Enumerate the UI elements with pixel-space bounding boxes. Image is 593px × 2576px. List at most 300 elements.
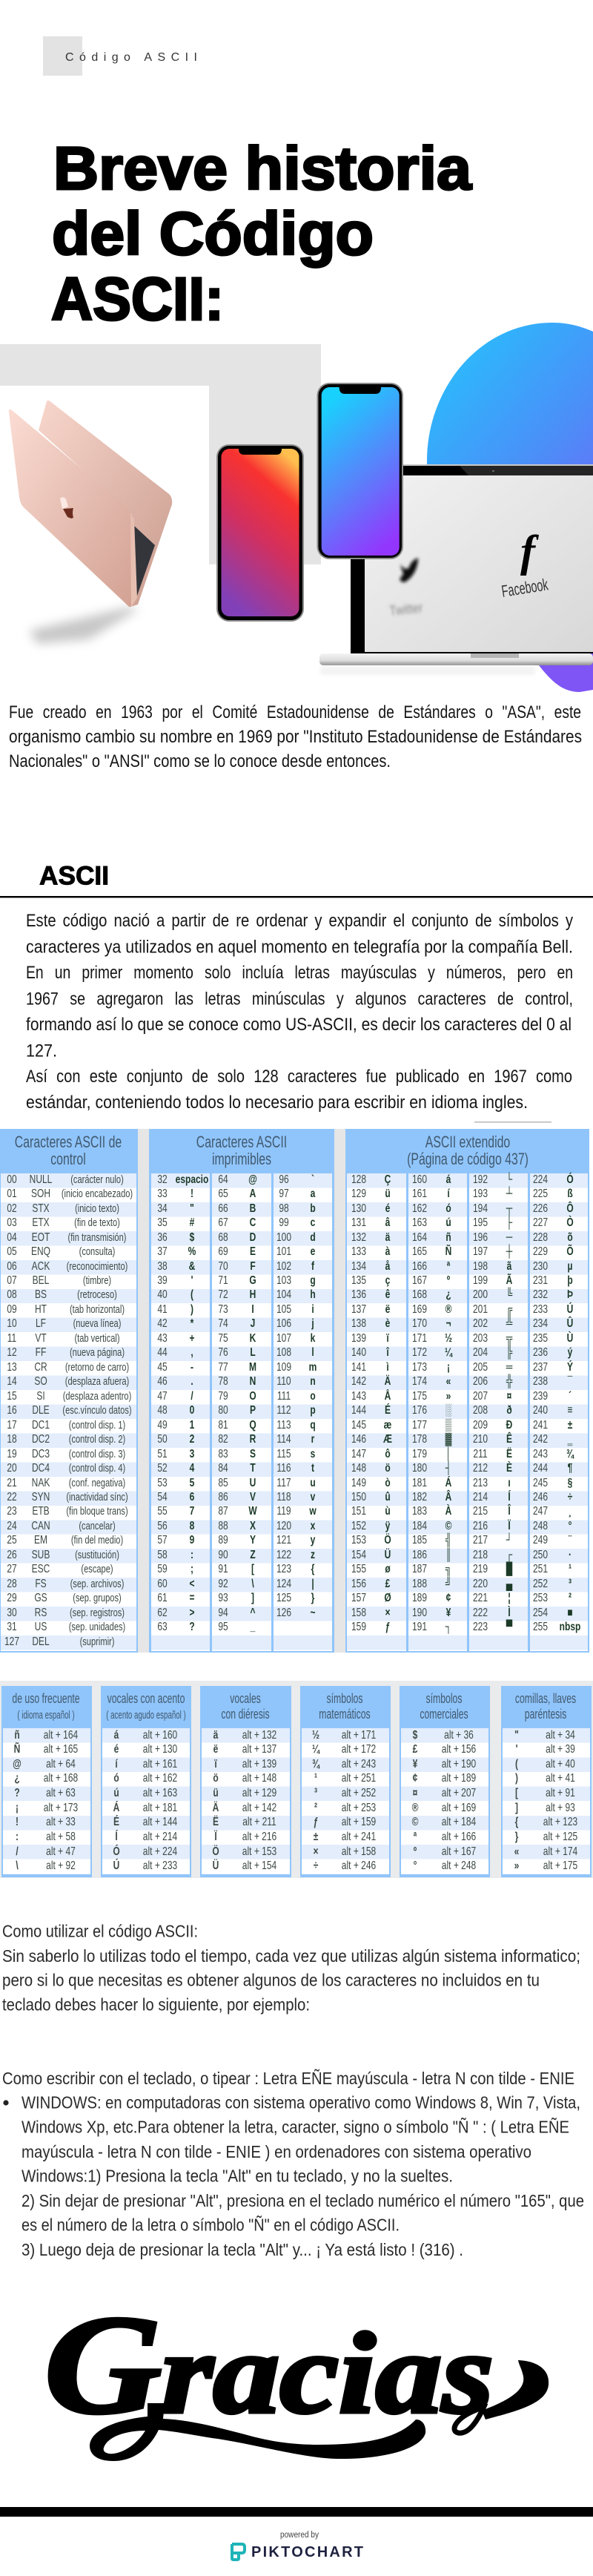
column: characters 32-63: # <box>189 1216 194 1229</box>
column: characters 64-95: Z <box>250 1549 255 1561</box>
column: characters 32-63 <box>175 1173 208 1633</box>
column: codes 32-63 <box>157 1173 168 1633</box>
text block: history of ASCII: estándar, conteniendo todos lo necesario para escribir en idioma ingles. <box>26 1093 528 1113</box>
column: characters 128-159 <box>383 1173 392 1633</box>
column: codes 160-191: 185 <box>412 1534 427 1546</box>
heading: matemáticos <box>319 1707 371 1722</box>
column: alt codes: alt + 233 <box>143 1859 177 1872</box>
column: control descriptions: (fin de texto) <box>74 1216 120 1229</box>
column: characters: « <box>514 1845 519 1858</box>
column: characters 128-159: à <box>385 1245 390 1258</box>
column: control codes: 03 <box>7 1216 17 1229</box>
column: characters: ½ <box>312 1729 319 1742</box>
column: codes 160-191: 173 <box>412 1361 427 1374</box>
column: codes 32-63: 55 <box>157 1505 168 1518</box>
column: characters: ¥ <box>413 1758 417 1770</box>
column: characters 128-159: ü <box>385 1187 390 1200</box>
row stripes <box>202 1728 290 1874</box>
column: alt codes: alt + 190 <box>442 1758 476 1770</box>
column: codes 224-255 <box>533 1173 548 1633</box>
column: control codes <box>4 1173 19 1648</box>
column: characters 128-159: è <box>385 1317 390 1330</box>
column: characters: ² <box>314 1802 317 1814</box>
column: characters 160-191: ¢ <box>446 1592 451 1604</box>
column: characters 96-126: z <box>311 1549 315 1561</box>
row stripes <box>347 1173 588 1651</box>
column: characters 224-255: ÷ <box>568 1491 572 1503</box>
column: control descriptions: (sep. registros) <box>70 1607 125 1619</box>
column: characters 128-159: ÿ <box>385 1520 390 1532</box>
column: characters 192-223: È <box>506 1462 512 1475</box>
column: codes 192-223: 204 <box>473 1346 488 1359</box>
column: codes 96-126: 102 <box>276 1259 291 1273</box>
column: characters 32-63: . <box>191 1375 193 1388</box>
column: codes 64-95: 90 <box>218 1549 228 1561</box>
column: characters 64-95: Y <box>250 1534 256 1546</box>
gray band behind alt code tables <box>0 1681 593 1878</box>
column: characters: " <box>514 1729 519 1742</box>
column: codes 224-255: 245 <box>533 1477 548 1489</box>
column: characters 64-95: M <box>249 1361 256 1374</box>
column: characters 192-223: ã <box>507 1259 511 1273</box>
column: characters 192-223: ┼ <box>506 1245 512 1258</box>
column: control codes: 22 <box>7 1491 17 1503</box>
column: codes 128-159: 151 <box>351 1505 366 1518</box>
column: alt codes: alt + 166 <box>442 1831 476 1843</box>
column: characters 128-159: £ <box>385 1578 390 1590</box>
column: alt codes: alt + 216 <box>242 1831 276 1843</box>
column: codes 192-223: 195 <box>473 1216 488 1229</box>
column: codes 32-63: 61 <box>157 1592 168 1604</box>
column: codes 224-255: 239 <box>533 1390 548 1403</box>
column: characters: ¹ <box>314 1772 317 1785</box>
tag label: Código ASCII <box>65 51 197 64</box>
column: codes 32-63: 46 <box>157 1375 168 1388</box>
column: control descriptions: (reconocimiento) <box>67 1259 127 1273</box>
column: codes 224-255: 229 <box>533 1245 548 1258</box>
column: codes 224-255: 253 <box>533 1592 548 1604</box>
column: codes 96-126: 121 <box>276 1534 291 1546</box>
column: characters: Í <box>115 1831 118 1843</box>
column: characters 128-159: ë <box>385 1303 390 1316</box>
column: control names: STX <box>32 1202 50 1215</box>
column: characters 96-126: x <box>311 1520 315 1532</box>
column: codes 192-223: 221 <box>473 1592 488 1604</box>
divider <box>210 1173 212 1653</box>
column: characters: » <box>514 1859 519 1872</box>
footer black band <box>0 2507 593 2517</box>
column: codes 192-223: 218 <box>473 1549 488 1561</box>
column: codes 128-159: 154 <box>351 1549 366 1561</box>
column: codes 64-95: 84 <box>218 1462 228 1475</box>
heading <box>515 1691 576 1722</box>
column: characters <box>514 1729 519 1872</box>
column: alt codes: alt + 137 <box>242 1743 276 1756</box>
column: control names: SO <box>34 1375 47 1388</box>
column: codes 32-63: 50 <box>157 1433 168 1446</box>
column: characters 224-255: ² <box>569 1592 572 1604</box>
column: characters: í <box>115 1758 118 1770</box>
column: codes 96-126: 119 <box>276 1505 291 1518</box>
column: alt codes: alt + 207 <box>442 1787 476 1799</box>
column: characters 192-223: Ê <box>506 1433 512 1446</box>
column: control names: ETX <box>32 1216 50 1229</box>
column: control descriptions: (control disp. 1) <box>69 1419 125 1432</box>
column: control codes: 25 <box>7 1534 17 1546</box>
heading: control <box>50 1150 86 1168</box>
column: characters 64-95: N <box>249 1375 256 1388</box>
column: codes 224-255: 249 <box>533 1534 548 1546</box>
column: characters 64-95: P <box>250 1404 256 1417</box>
column: control names: DLE <box>32 1404 50 1417</box>
column: characters 64-95: Q <box>249 1419 256 1432</box>
text block: typing instructions: 3) Luego deja de presionar la tecla "Alt" y... ¡ Ya está listo ! (316) . <box>21 2240 463 2259</box>
column: characters 64-95: B <box>249 1202 256 1215</box>
lettering: Gracias: Gracias <box>44 2287 494 2443</box>
column: characters 128-159: â <box>385 1216 390 1229</box>
column: codes 96-126: 101 <box>276 1245 291 1258</box>
column: characters 192-223: ╩ <box>506 1317 512 1330</box>
tag: gray square <box>43 36 82 76</box>
heading: Caracteres ASCII <box>196 1132 287 1151</box>
column: codes 160-191: 179 <box>412 1448 427 1460</box>
column: control codes: 21 <box>7 1477 17 1489</box>
column: characters: ä <box>213 1729 218 1742</box>
column: characters 128-159: Æ <box>383 1433 392 1446</box>
column: control names: GS <box>34 1592 47 1604</box>
column: control codes: 27 <box>7 1563 17 1575</box>
column: codes 96-126: 106 <box>276 1317 291 1330</box>
column: control descriptions: (tab horizontal) <box>70 1303 125 1316</box>
row stripes <box>503 1728 590 1874</box>
column: characters 224-255: Û <box>567 1317 573 1330</box>
column: codes 64-95: 65 <box>218 1187 228 1200</box>
column: characters: { <box>515 1816 518 1828</box>
column: control codes: 16 <box>7 1404 17 1417</box>
column: control descriptions: (suprimir) <box>80 1635 114 1648</box>
panel: símbolos matemáticos <box>300 1686 391 1877</box>
column: characters 64-95: I <box>251 1303 254 1316</box>
column: characters 160-191: ░ <box>445 1404 451 1417</box>
column: control codes: 01 <box>7 1187 17 1200</box>
column: control descriptions: (fin bloque trans) <box>66 1505 128 1518</box>
column: control descriptions: (carácter nulo) <box>70 1173 124 1186</box>
column: codes 160-191: 176 <box>412 1404 427 1417</box>
column: characters: ± <box>314 1831 318 1843</box>
column: characters 192-223: ▄ <box>506 1578 512 1590</box>
column: control names: RS <box>35 1607 47 1619</box>
column: control codes: 28 <box>7 1578 17 1590</box>
heading: ASCII extendido <box>425 1132 510 1151</box>
column: characters 160-191: ¬ <box>445 1317 451 1330</box>
column: characters 224-255: Ý <box>567 1361 573 1374</box>
column: codes 32-63: 51 <box>157 1448 168 1460</box>
column: codes 128-159: 152 <box>351 1520 366 1532</box>
column: alt codes: alt + 243 <box>342 1758 376 1770</box>
column: codes 32-63: 33 <box>157 1187 168 1200</box>
column: codes 160-191: 166 <box>412 1259 427 1273</box>
column: control codes: 15 <box>7 1390 17 1403</box>
heading: con diéresis <box>221 1707 270 1722</box>
column: characters: } <box>515 1831 518 1843</box>
column: characters 160-191: │ <box>445 1448 451 1460</box>
column: control names: SI <box>36 1390 45 1403</box>
column: codes 160-191: 163 <box>412 1216 427 1229</box>
column: characters 128-159: Ø <box>384 1592 391 1604</box>
column: characters 64-95: H <box>249 1288 256 1301</box>
column: control descriptions: (escape) <box>81 1563 113 1575</box>
column: characters 96-126: h <box>310 1288 316 1301</box>
column: codes 64-95: 71 <box>218 1274 228 1287</box>
column: codes 64-95: 73 <box>218 1303 228 1316</box>
column: alt codes: alt + 47 <box>46 1845 76 1858</box>
panel: de uso frecuente <box>1 1686 92 1877</box>
column: control codes: 11 <box>7 1332 16 1345</box>
column: alt codes: alt + 181 <box>143 1802 177 1814</box>
column: codes 64-95: 94 <box>218 1607 228 1619</box>
column: alt codes <box>242 1729 276 1872</box>
row stripes <box>3 1728 90 1874</box>
column: characters 160-191: ╗ <box>445 1563 451 1575</box>
column: codes 128-159: 141 <box>351 1361 366 1374</box>
column: codes 96-126: 112 <box>276 1404 291 1417</box>
column: characters 192-223: ▀ <box>506 1621 512 1633</box>
column: characters 96-126: k <box>311 1332 315 1345</box>
column: control codes: 10 <box>7 1317 17 1330</box>
column: alt codes: alt + 156 <box>442 1743 476 1756</box>
column: characters 192-223: ð <box>506 1404 512 1417</box>
column: codes 224-255: 251 <box>533 1563 548 1575</box>
column: characters 64-95: ^ <box>250 1607 255 1619</box>
column: characters: £ <box>413 1743 417 1756</box>
column: codes 96-126: 125 <box>276 1592 291 1604</box>
column: codes 128-159: 153 <box>351 1534 366 1546</box>
column: codes 224-255: 243 <box>533 1448 548 1460</box>
column: control names: BEL <box>33 1274 49 1287</box>
column: characters 160-191: ▒ <box>445 1419 451 1432</box>
column: characters 96-126: f <box>311 1259 314 1273</box>
column: codes 96-126: 116 <box>276 1462 291 1475</box>
column: alt codes: alt + 144 <box>143 1816 177 1828</box>
column: control names: DC3 <box>32 1448 50 1460</box>
column: codes 64-95: 76 <box>218 1346 228 1359</box>
divider <box>406 1173 408 1653</box>
text block: typing instructions: Windows:1) Presiona la tecla "Alt" en tu teclado, y no la sueltes. <box>21 2167 453 2186</box>
column: codes 224-255: 231 <box>533 1274 548 1287</box>
column: control descriptions: (nueva línea) <box>73 1317 121 1330</box>
column: codes 32-63: 45 <box>157 1361 168 1374</box>
column: alt codes <box>342 1729 376 1872</box>
column: codes 128-159: 157 <box>351 1592 366 1604</box>
column: control descriptions: (control disp. 3) <box>69 1448 125 1460</box>
column: control codes: 04 <box>7 1231 17 1244</box>
column: characters 64-95: U <box>249 1477 256 1489</box>
column: alt codes: alt + 64 <box>46 1758 76 1770</box>
gray gutter between control and printable tables <box>138 1129 149 1653</box>
column: control codes: 02 <box>7 1202 17 1215</box>
column: characters 224-255: þ <box>567 1274 573 1287</box>
column: codes 64-95: 82 <box>218 1433 228 1446</box>
column: codes 96-126: 97 <box>279 1187 289 1200</box>
text block: typing instructions: mayúscula - letra N con tilde - ENIE ) en ordenadores con sistema operativo <box>21 2142 531 2161</box>
column: codes 192-223: 201 <box>473 1303 488 1316</box>
column: codes 192-223: 222 <box>473 1607 488 1619</box>
column: codes 224-255: 234 <box>533 1317 548 1330</box>
column: characters 160-191: Ñ <box>445 1245 451 1258</box>
column: alt codes: alt + 33 <box>46 1816 76 1828</box>
column: characters 192-223: ┬ <box>506 1202 512 1215</box>
column: control descriptions: (control disp. 4) <box>69 1462 125 1475</box>
column: codes 128-159: 139 <box>351 1332 366 1345</box>
column: characters 96-126: i <box>311 1303 314 1316</box>
heading <box>221 1691 270 1722</box>
column: characters: Ñ <box>14 1743 20 1756</box>
panel: símbolos comerciales <box>400 1686 490 1877</box>
column: characters 64-95: @ <box>248 1173 257 1186</box>
column: codes 160-191: 164 <box>412 1231 427 1244</box>
column: codes 192-223: 206 <box>473 1375 488 1388</box>
column: control descriptions: (sep. grupos) <box>73 1592 122 1604</box>
heading: paréntesis <box>525 1707 566 1722</box>
column: codes 96-126: 103 <box>276 1274 291 1287</box>
title: ASCII: <box>51 266 224 333</box>
column: codes 64-95: 70 <box>218 1259 228 1273</box>
column: characters: ª <box>414 1831 417 1843</box>
heading <box>196 1132 287 1168</box>
column: characters 160-191: ¼ <box>445 1346 452 1359</box>
column: characters 64-95: E <box>250 1245 256 1258</box>
column: control codes: 08 <box>7 1288 17 1301</box>
illustration: phone with blue gradient <box>317 383 403 559</box>
column: characters 32-63: 2 <box>189 1433 194 1446</box>
column: characters 160-191 <box>445 1173 453 1634</box>
column: characters 160-191: ® <box>445 1303 451 1316</box>
column: codes 96-126: 122 <box>276 1549 291 1561</box>
column: alt codes: alt + 167 <box>442 1845 476 1858</box>
column: control names: EM <box>34 1534 47 1546</box>
column: codes 32-63: 53 <box>157 1477 168 1489</box>
column: characters 96-126: r <box>311 1433 314 1446</box>
column: characters 224-255: ° <box>569 1520 572 1532</box>
heading: comerciales <box>420 1707 468 1722</box>
column: characters 192-223: ╦ <box>506 1332 512 1345</box>
column: alt codes: alt + 163 <box>143 1787 177 1799</box>
column: characters 32-63: ! <box>191 1187 193 1200</box>
column: codes 160-191: 191 <box>412 1621 427 1633</box>
column: codes 64-95: 93 <box>218 1592 228 1604</box>
column: characters: ³ <box>314 1787 317 1799</box>
column: characters 160-191: ┐ <box>445 1621 451 1633</box>
column: codes 160-191 <box>412 1173 427 1633</box>
column: codes 224-255: 250 <box>533 1549 548 1561</box>
column: characters 32-63: 1 <box>189 1419 194 1432</box>
column: codes 64-95: 75 <box>218 1332 228 1345</box>
column: characters 64-95: V <box>250 1491 256 1503</box>
column: control codes: 06 <box>7 1259 17 1273</box>
column: codes 192-223: 200 <box>473 1288 488 1301</box>
column: codes 224-255: 228 <box>533 1231 548 1244</box>
column: codes 32-63: 63 <box>157 1621 168 1633</box>
text block: typing instructions <box>2 2069 584 2259</box>
column: characters 64-95: R <box>249 1433 256 1446</box>
column: control names: ACK <box>32 1259 50 1273</box>
column: codes 128-159: 159 <box>351 1621 366 1633</box>
column: codes 224-255: 233 <box>533 1303 548 1316</box>
column: characters: × <box>313 1845 319 1858</box>
column: characters: ¼ <box>312 1743 319 1756</box>
column: characters 224-255: Þ <box>567 1288 573 1301</box>
column: control names: NULL <box>30 1173 52 1186</box>
column: codes 128-159: 134 <box>351 1259 366 1273</box>
column: characters 32-63: + <box>189 1332 194 1345</box>
column: characters 96-126: g <box>310 1274 316 1287</box>
illustration: laptop with social screen <box>319 464 593 675</box>
column: codes 160-191: 190 <box>412 1607 427 1619</box>
column: characters 64-95: S <box>250 1448 256 1460</box>
column: alt codes <box>442 1729 476 1872</box>
column: characters: ë <box>213 1743 218 1756</box>
row stripes <box>302 1728 389 1874</box>
column: characters 192-223: ¤ <box>507 1390 511 1403</box>
column: control names: CR <box>34 1361 47 1374</box>
column: characters <box>412 1729 418 1872</box>
column: characters 224-255: ¨ <box>569 1534 572 1546</box>
divider <box>528 1173 530 1653</box>
column: characters 224-255: ¯ <box>568 1375 572 1388</box>
column: characters: Ö <box>212 1845 219 1858</box>
column: characters 128-159: ù <box>385 1505 390 1518</box>
column: alt codes: alt + 252 <box>342 1787 376 1799</box>
column: characters <box>13 1729 21 1872</box>
column: codes 64-95: 81 <box>218 1419 228 1432</box>
column: codes 192-223: 208 <box>473 1404 488 1417</box>
column: characters 160-191: ▓ <box>445 1433 451 1446</box>
column: codes 224-255: 226 <box>533 1202 548 1215</box>
column: codes 128-159: 148 <box>351 1462 366 1475</box>
column: codes 224-255: 244 <box>533 1462 548 1475</box>
column: characters: @ <box>13 1758 21 1770</box>
column: characters 96-126 <box>309 1173 317 1619</box>
column: control names: VT <box>35 1332 47 1345</box>
column: control descriptions: (tab vertical) <box>74 1332 120 1345</box>
column: characters: ® <box>412 1802 418 1814</box>
column: codes 224-255: 235 <box>533 1332 548 1345</box>
panel: vocales con acento <box>101 1686 191 1877</box>
column: characters 192-223: █ <box>506 1563 512 1575</box>
column: characters 128-159: Å <box>384 1390 391 1403</box>
column: codes 224-255: 246 <box>533 1491 548 1503</box>
column: codes 160-191: 182 <box>412 1491 427 1503</box>
column: characters 224-255: nbsp <box>560 1621 580 1633</box>
column: characters 32-63: ' <box>191 1274 193 1287</box>
column: characters 224-255: Ù <box>567 1332 573 1345</box>
column: alt codes: alt + 246 <box>342 1859 376 1872</box>
column: characters 96-126: u <box>310 1477 316 1489</box>
column: characters 224-255: ± <box>568 1419 572 1432</box>
column: codes 96-126: 110 <box>276 1375 291 1388</box>
column: control codes: 14 <box>7 1375 17 1388</box>
column: codes 64-95: 88 <box>218 1520 228 1532</box>
row stripes <box>102 1728 190 1874</box>
column: codes 160-191: 161 <box>412 1187 427 1200</box>
heading: (Página de código 437) <box>407 1150 529 1168</box>
column: alt codes: alt + 58 <box>46 1831 76 1843</box>
column: control codes: 09 <box>7 1303 17 1316</box>
column: characters 64-95: F <box>250 1259 255 1273</box>
text block: history of ASCII: 127. <box>26 1041 57 1061</box>
panel: vocales con diéresis <box>200 1686 291 1877</box>
column: alt codes: alt + 251 <box>342 1772 376 1785</box>
